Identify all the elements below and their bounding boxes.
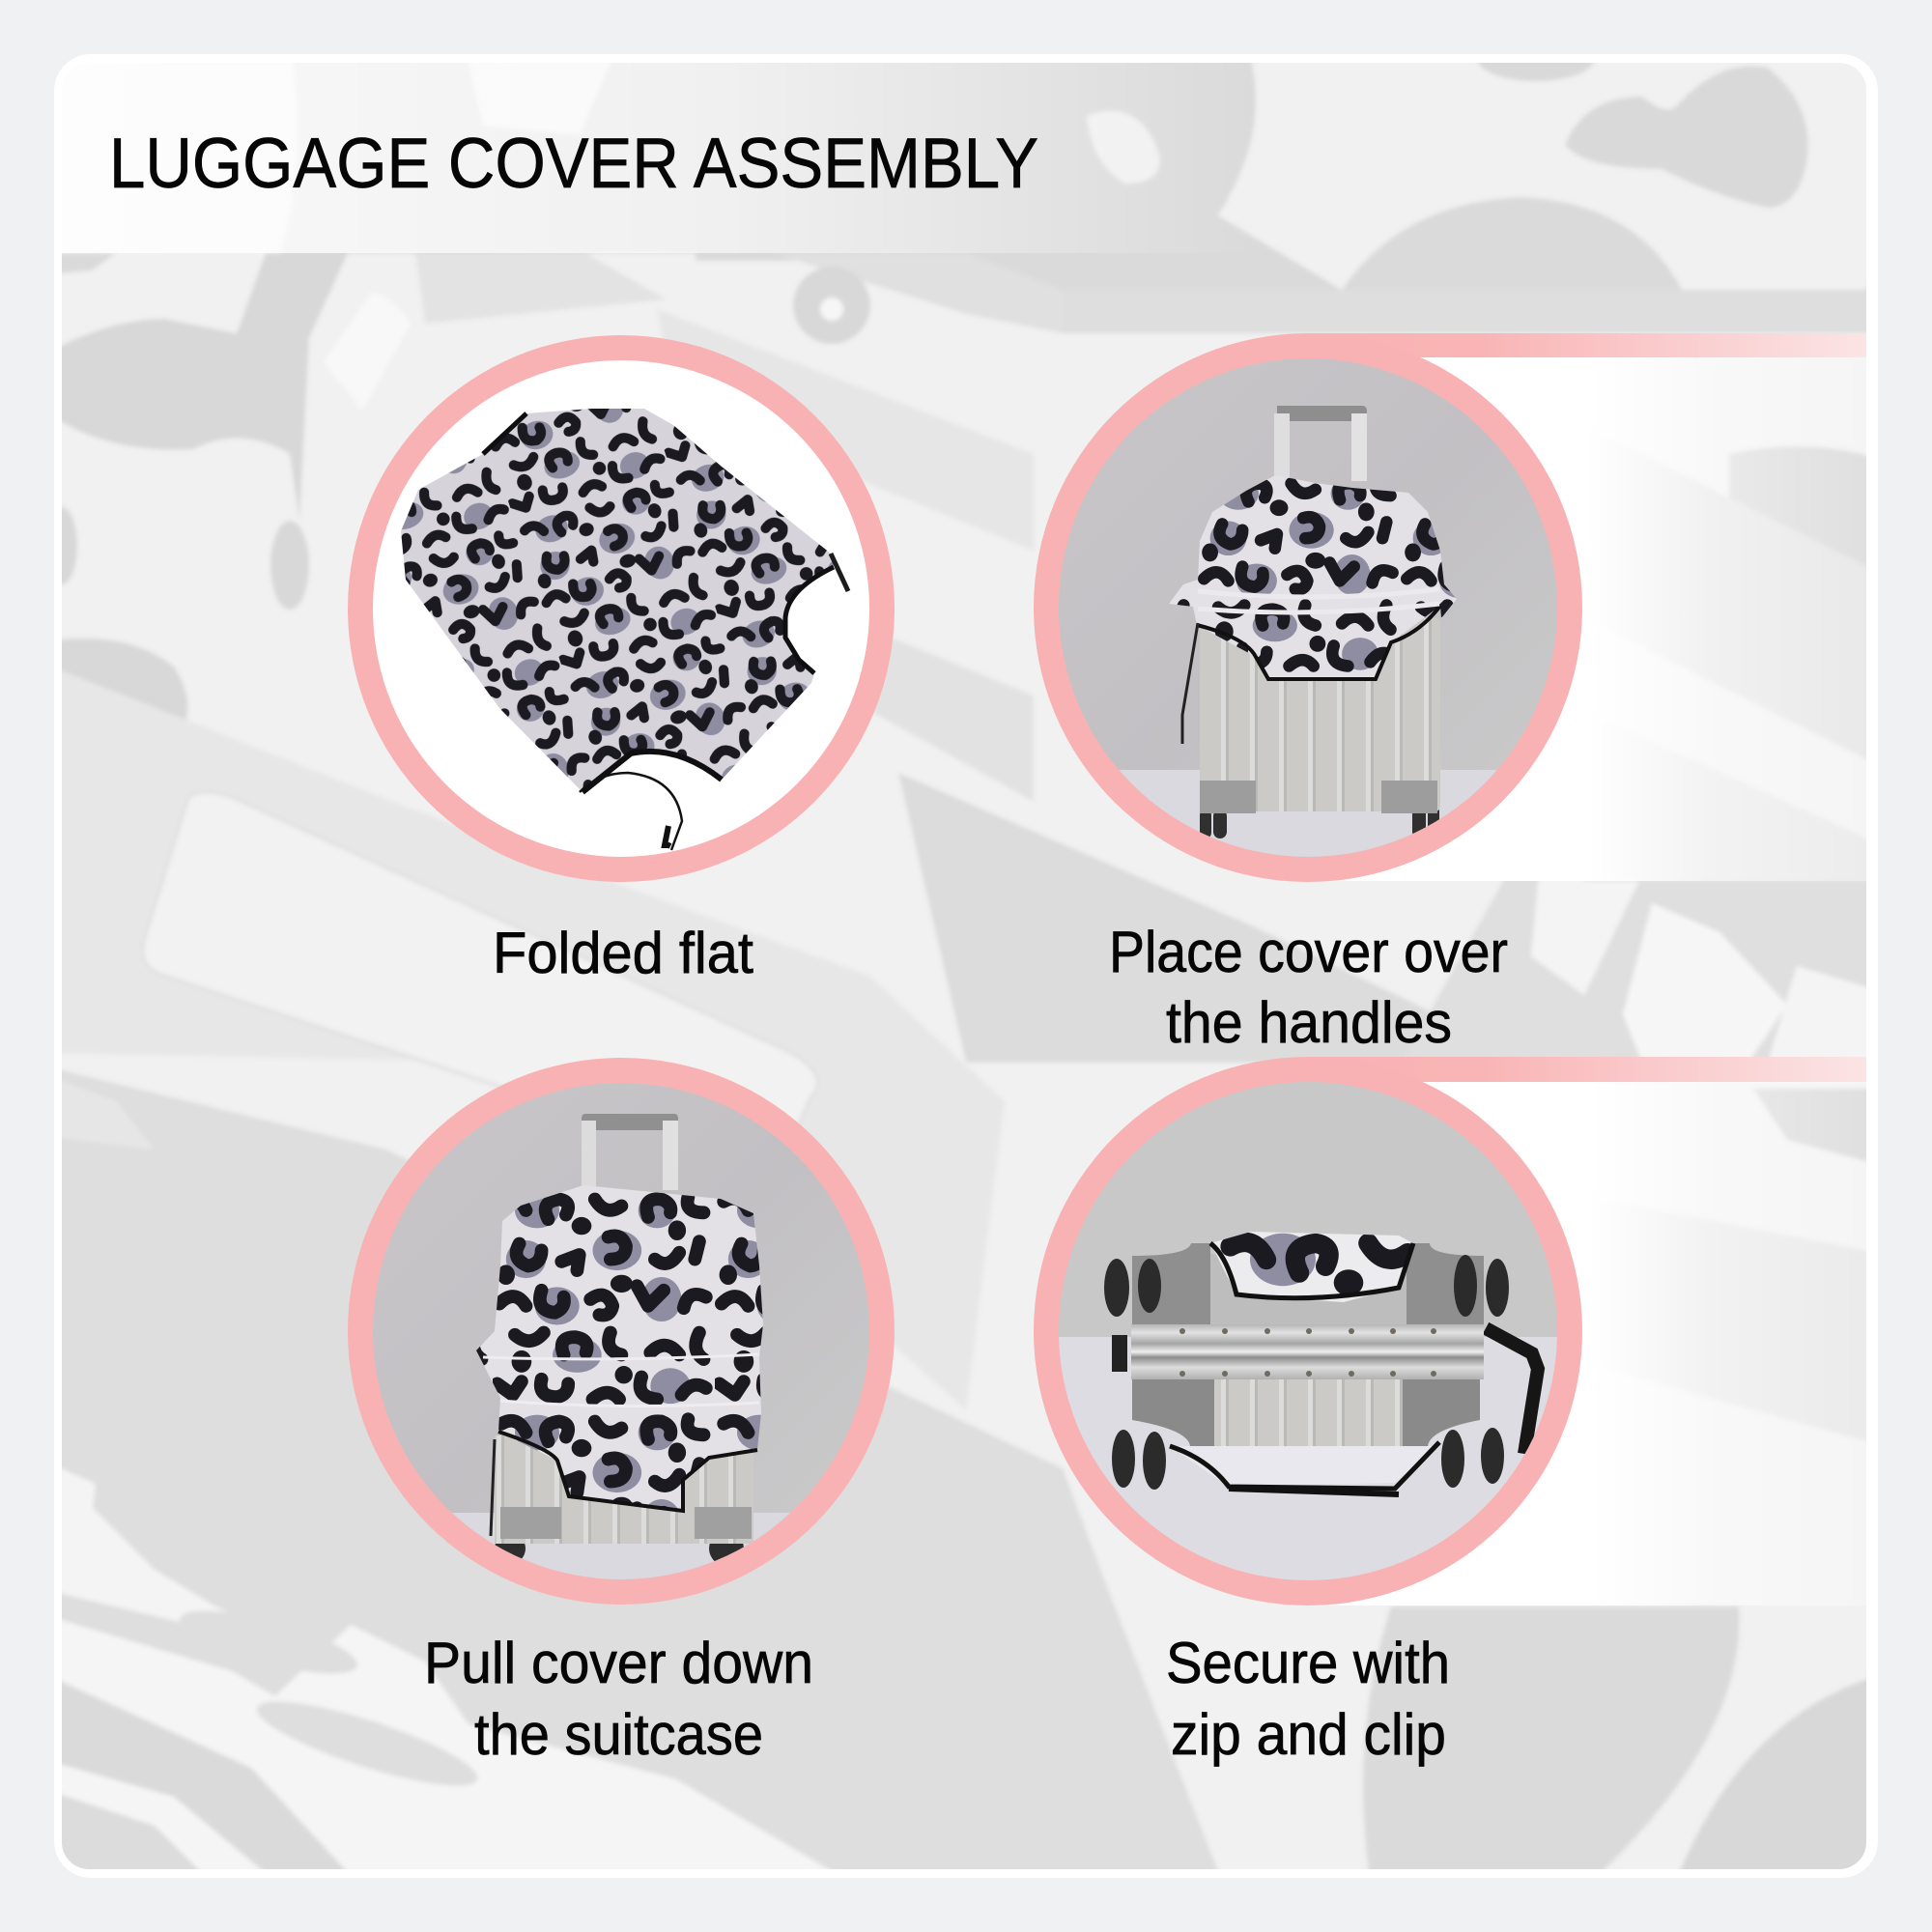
white panel behind circle 4 [1308, 1082, 1866, 1605]
label: Pull cover down [424, 1631, 813, 1695]
wheels [495, 1544, 744, 1561]
cover [476, 1185, 763, 1511]
pink bar at circle 2 [1308, 333, 1866, 357]
header area shapes [282, 63, 694, 254]
centre right rail bands [899, 775, 1430, 1063]
panel: pull cover down [348, 1058, 895, 1767]
label [1109, 920, 1508, 1055]
pink bar at circle 4 [1308, 1057, 1866, 1082]
rivets [1179, 1328, 1436, 1377]
lower silver panel [1214, 1379, 1403, 1447]
label [424, 1631, 813, 1767]
suitcase body [1200, 618, 1440, 811]
lower corners [1132, 1378, 1214, 1446]
lower-right shapes [1363, 1606, 1740, 1893]
upper corners [1132, 1243, 1210, 1328]
photo: cover pulled down [348, 1058, 895, 1605]
top cover flap [1210, 1232, 1413, 1302]
panel: place cover over handles [1034, 333, 1582, 1055]
wheels [1200, 810, 1439, 838]
label: the handles [1166, 990, 1452, 1055]
suitcase body [495, 1435, 753, 1544]
label: Secure with [1166, 1631, 1450, 1695]
white panel behind circle 2 [1308, 357, 1866, 881]
rail [1131, 1324, 1484, 1379]
upper-left rail shapes [415, 253, 667, 324]
telescopic handle [582, 1114, 678, 1130]
label [1166, 1631, 1450, 1767]
upper silver panel [1210, 1254, 1406, 1326]
cover [1169, 475, 1457, 679]
photo: flat leopard cover [348, 335, 895, 882]
strap [1486, 1328, 1538, 1454]
mid-left panel shapes [39, 662, 1005, 1410]
lower-left shapes [39, 1065, 1227, 1893]
title: LUGGAGE COVER ASSEMBLY [109, 125, 1038, 203]
photo: suitcase base with zip [1034, 1057, 1582, 1605]
label: Place cover over [1109, 920, 1508, 984]
photo: cover over the handles [1034, 333, 1582, 882]
panel: folded flat [348, 335, 895, 985]
panel: secure with zip and clip [1034, 1057, 1582, 1767]
telescopic handle [1277, 406, 1367, 421]
label: Folded flat [493, 921, 753, 985]
label: the suitcase [474, 1702, 763, 1767]
wheels [1104, 1255, 1509, 1490]
label: zip and clip [1171, 1702, 1446, 1767]
header band [62, 63, 1053, 253]
